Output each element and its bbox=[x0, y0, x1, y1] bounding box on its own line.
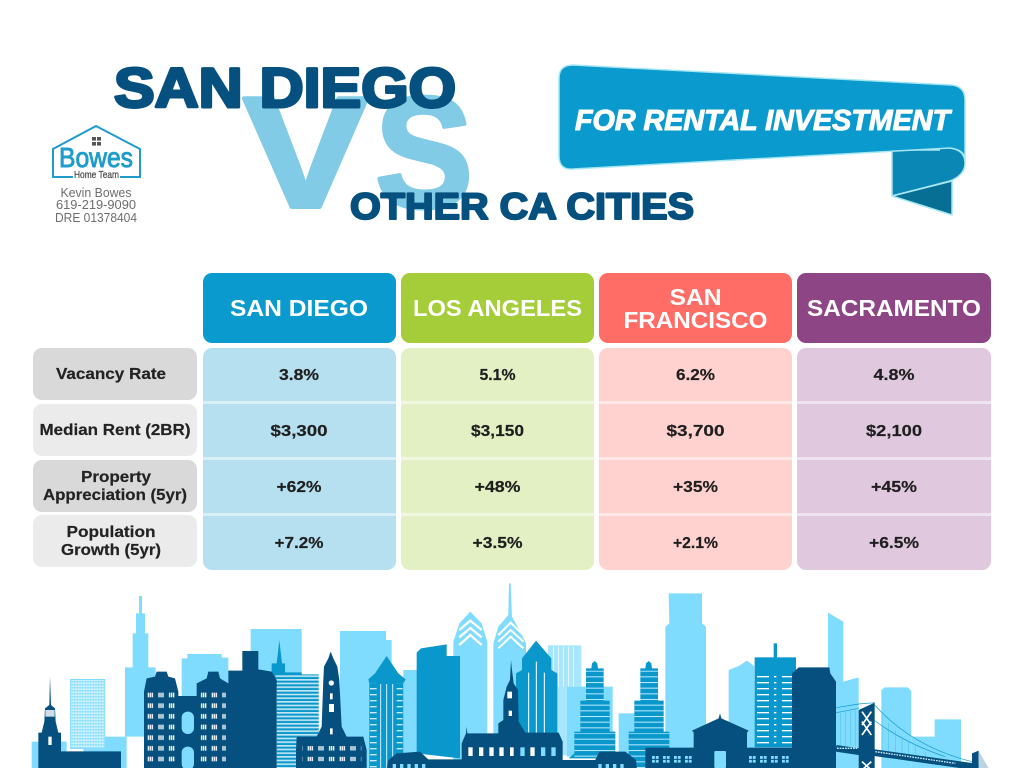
column: Los Angeles bbox=[401, 348, 594, 570]
column: San Francisco: 6.2% bbox=[676, 367, 715, 384]
row labels: Appreciation (5yr) bbox=[43, 487, 187, 504]
title: San Diego: SAN DIEGO bbox=[114, 56, 456, 119]
ribbon banner bbox=[559, 65, 965, 215]
row labels: Median Rent (2BR) bbox=[40, 422, 190, 439]
logo: Bowes Home Team bbox=[53, 126, 140, 181]
column: San Diego: +62% bbox=[276, 479, 322, 496]
title: Other CA Cities: OTHER CA CITIES bbox=[350, 186, 694, 227]
contact details: Kevin Bowes bbox=[60, 186, 132, 200]
banner text: FOR RENTAL INVESTMENT bbox=[575, 105, 952, 137]
title: VS backdrop bbox=[243, 65, 473, 241]
column: San Diego: +7.2% bbox=[274, 535, 324, 552]
column: San Francisco: +35% bbox=[673, 479, 718, 496]
table headers: SAN DIEGO bbox=[230, 295, 368, 321]
row labels: Vacancy Rate bbox=[56, 366, 166, 383]
column: Sacramento: $2,100 bbox=[866, 423, 922, 440]
title: VS backdrop: S bbox=[375, 65, 473, 241]
column: San Diego bbox=[203, 348, 396, 570]
contact details: DRE 01378404 bbox=[55, 211, 137, 225]
table headers: LOS ANGELES bbox=[413, 295, 582, 321]
table headers: FRANCISCO bbox=[624, 307, 768, 333]
row labels: Population bbox=[66, 524, 156, 541]
table headers: SAN bbox=[670, 284, 722, 310]
column: Los Angeles: +3.5% bbox=[472, 535, 522, 552]
skyline illustration bbox=[32, 583, 989, 768]
column: Sacramento: +6.5% bbox=[869, 535, 919, 552]
column: San Francisco: +2.1% bbox=[673, 535, 718, 552]
column: Sacramento bbox=[797, 348, 991, 570]
column: Los Angeles: 5.1% bbox=[480, 367, 516, 384]
title: VS backdrop: V bbox=[243, 65, 368, 241]
column: Los Angeles: +48% bbox=[474, 479, 520, 496]
column: San Francisco: $3,700 bbox=[666, 423, 725, 440]
row labels bbox=[33, 348, 197, 567]
contact details bbox=[55, 186, 137, 225]
column: Los Angeles: $3,150 bbox=[471, 423, 524, 440]
logo: Bowes Home Team: Home Team bbox=[74, 169, 119, 181]
row labels: Property bbox=[81, 469, 151, 486]
table headers: SACRAMENTO bbox=[807, 295, 981, 321]
column: San Francisco bbox=[599, 348, 792, 570]
contact details: 619-219-9090 bbox=[56, 198, 136, 212]
row labels: Growth (5yr) bbox=[61, 542, 161, 559]
column: Sacramento: +45% bbox=[871, 479, 917, 496]
table headers bbox=[203, 273, 991, 343]
column: San Diego: $3,300 bbox=[270, 423, 328, 440]
column: San Diego: 3.8% bbox=[279, 367, 319, 384]
column: Sacramento: 4.8% bbox=[874, 367, 914, 384]
logo: Bowes Home Team: Bowes bbox=[59, 142, 133, 173]
